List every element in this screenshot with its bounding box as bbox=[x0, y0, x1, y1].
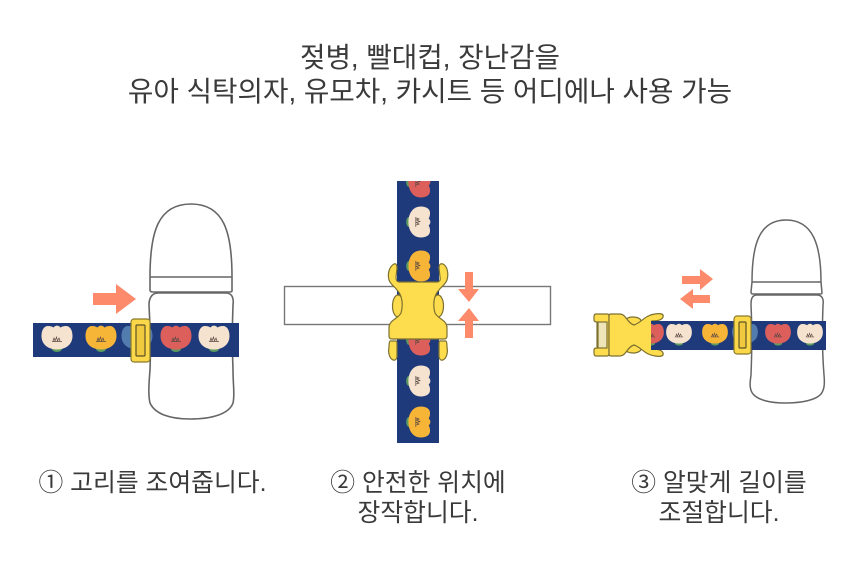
arrows pressing inward bbox=[458, 272, 479, 338]
caption 2: ② 안전한 위치에 bbox=[330, 469, 506, 497]
panel: step 1 tighten the loop bbox=[33, 204, 239, 419]
icon: slider buckle bbox=[734, 316, 751, 354]
title bbox=[128, 42, 732, 107]
panel: step 3 adjust length bbox=[594, 220, 826, 403]
caption 2: 장작합니다. bbox=[358, 499, 478, 527]
caption 3: ③ 알맞게 길이를 bbox=[631, 469, 807, 497]
icon: slider buckle bbox=[131, 319, 150, 362]
icon: bottle bbox=[149, 204, 234, 419]
caption 1: ① 고리를 조여줍니다. bbox=[39, 469, 266, 497]
title: 젖병, 빨대컵, 장난감을 bbox=[300, 42, 560, 73]
arrows left and right bbox=[680, 269, 713, 309]
strap with flowers bbox=[33, 323, 239, 357]
icon: bottle bbox=[750, 220, 824, 403]
white band bbox=[284, 286, 550, 324]
icon: side-release buckle bbox=[594, 314, 663, 356]
caption 2 bbox=[330, 469, 506, 527]
title: 유아 식탁의자, 유모차, 카시트 등 어디에나 사용 가능 bbox=[128, 76, 732, 107]
arrow bbox=[93, 284, 136, 314]
icon: side-release buckle bbox=[388, 264, 448, 360]
strap with flowers bbox=[397, 166, 439, 443]
caption 3: 조절합니다. bbox=[659, 499, 779, 527]
caption 3 bbox=[631, 469, 807, 527]
strap with flowers bbox=[638, 321, 826, 350]
panel: step 2 fasten buckle bbox=[284, 166, 550, 443]
